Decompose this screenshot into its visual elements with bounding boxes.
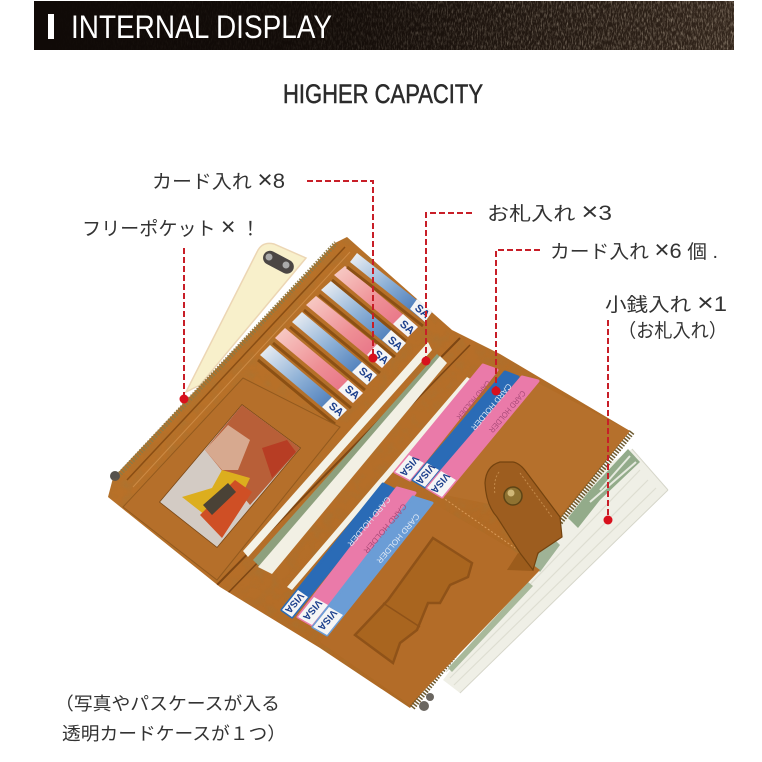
front pocket flap bbox=[320, 383, 630, 705]
callout: bill pockets x3: お札入れ ×3 bbox=[487, 198, 612, 226]
zipper: lower edge bbox=[412, 432, 632, 708]
white VISA tags bbox=[395, 455, 456, 497]
zipper pulls bbox=[110, 471, 434, 711]
callout: card slots x6: カード入れ ×6 個 . bbox=[550, 236, 718, 264]
header band bbox=[34, 1, 734, 50]
header title: INTERNAL DISPLAY bbox=[71, 9, 332, 45]
smartphone in free pocket bbox=[186, 243, 306, 392]
right card slots: VISA bbox=[428, 470, 452, 495]
lower card slots: CARD HOLDER bbox=[374, 512, 421, 565]
bill compartments bbox=[217, 338, 472, 593]
white tags and VISA marks on upper cards bbox=[322, 299, 432, 420]
callout: coin pocket bbox=[604, 289, 727, 524]
white tags and VISA marks on upper cards: SA bbox=[326, 400, 346, 419]
white strip one bbox=[243, 342, 432, 557]
callout: card slots x6 bbox=[492, 236, 718, 396]
note: transparent card case: （写真やパスケースが入る bbox=[55, 694, 280, 714]
white VISA tags bbox=[282, 590, 343, 635]
wallet body bbox=[108, 237, 630, 708]
zipper: upper edge bbox=[116, 243, 336, 478]
callout: free pocket: フリーポケット × ！ bbox=[82, 213, 260, 241]
eight card slots bbox=[258, 253, 432, 424]
white tags and VISA marks on upper cards: SA bbox=[356, 365, 376, 384]
callout: free pocket bbox=[82, 213, 260, 404]
note: transparent card case: 透明カードケースが１つ） bbox=[62, 724, 286, 744]
white tags and VISA marks on upper cards: SA bbox=[371, 348, 391, 367]
embossed logo patch bbox=[355, 538, 472, 663]
right card slots: CARD HOLDER bbox=[487, 389, 527, 434]
white strip two bbox=[258, 356, 447, 574]
subtitle: HIGHER CAPACITY bbox=[283, 79, 483, 109]
callout: coin pocket: 小銭入れ ×1 bbox=[605, 289, 727, 317]
note: transparent card case bbox=[55, 694, 286, 744]
right card slots: CARD HOLDER bbox=[469, 382, 513, 432]
callout: card slots x8 bbox=[152, 166, 378, 362]
lower card slots: VISA bbox=[315, 607, 339, 632]
white strip three bbox=[287, 377, 472, 590]
lower card slots: VISA bbox=[282, 590, 306, 615]
white tags and VISA marks on upper cards: SA bbox=[412, 302, 432, 321]
white tags and VISA marks on upper cards: SA bbox=[397, 318, 417, 337]
right card slots bbox=[395, 365, 538, 497]
ID window pocket bbox=[123, 378, 340, 580]
white tags and VISA marks on upper cards: SA bbox=[342, 383, 362, 402]
lower card slots: CARD HOLDER bbox=[361, 502, 408, 555]
snap strap bbox=[485, 462, 562, 571]
callout: bill pockets x3 bbox=[422, 198, 612, 366]
lower card slots bbox=[282, 484, 432, 635]
leather grain texture bbox=[108, 256, 628, 706]
green note strip bbox=[253, 354, 441, 566]
photo inside window bbox=[160, 405, 300, 547]
header accent bar bbox=[48, 14, 54, 39]
right card slots: CARD HOLDER bbox=[454, 379, 492, 421]
callout: card slots x8: カード入れ ×8 bbox=[152, 166, 285, 194]
white tags and VISA marks on upper cards: SA bbox=[385, 334, 405, 353]
right card slots: VISA bbox=[413, 461, 437, 486]
lower card slots: VISA bbox=[300, 597, 324, 622]
stack of banknotes bbox=[443, 449, 668, 693]
lower card slots: CARD HOLDER bbox=[345, 495, 392, 548]
right card slots: VISA bbox=[397, 453, 421, 478]
snap button bbox=[504, 487, 522, 505]
card slots panel bbox=[127, 247, 432, 487]
callout: coin pocket: （お札入れ） bbox=[618, 320, 727, 342]
product photo: wallet bbox=[100, 230, 668, 720]
